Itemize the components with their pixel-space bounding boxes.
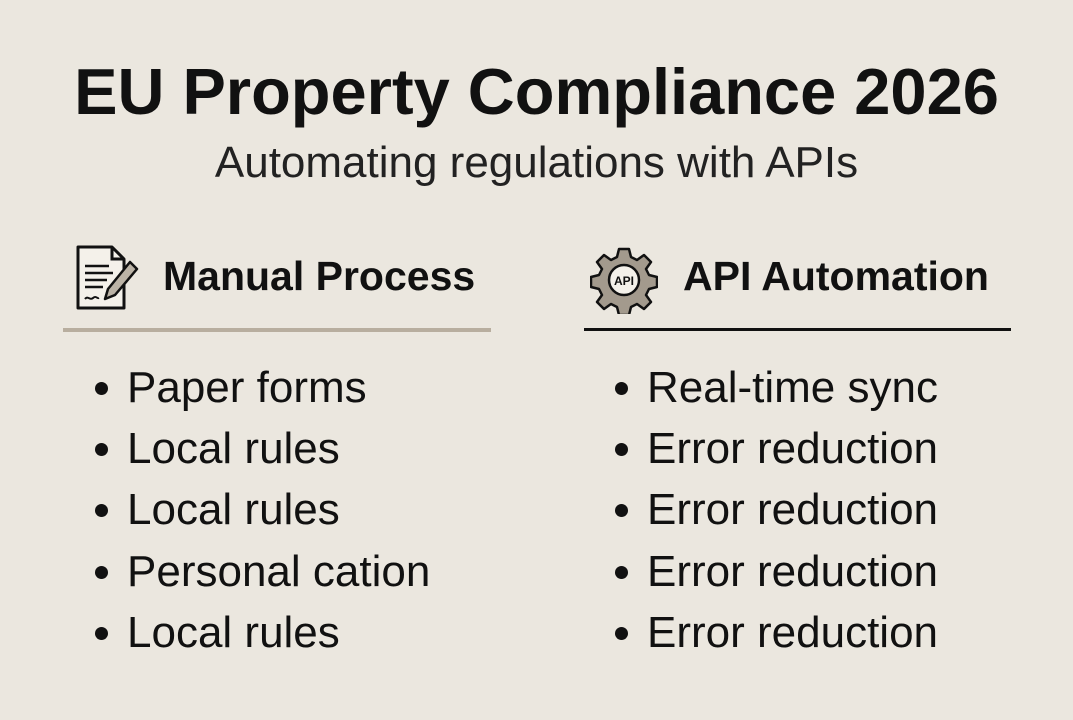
list: api: Error reduction [647, 608, 938, 657]
list: manual: Local rules [127, 485, 340, 534]
icon: document with pencil [76, 246, 138, 310]
heading: api automation: API Automation [683, 253, 989, 299]
list: manual: Personal cation [127, 547, 430, 596]
list: api: Real-time sync [647, 363, 938, 412]
list: manual: Paper forms [127, 363, 367, 412]
list: manual: Local rules [127, 424, 340, 473]
panel: manual process [63, 246, 491, 657]
list: manual: Local rules [127, 608, 340, 657]
title: EU Property Compliance 2026 [74, 55, 999, 128]
subtitle: Automating regulations with APIs [215, 138, 858, 187]
icon: API gear: API [614, 274, 634, 288]
divider black [584, 328, 1011, 331]
list: api: Error reduction [647, 547, 938, 596]
list: manual [95, 363, 430, 657]
divider gray [63, 328, 491, 332]
list: api: Error reduction [647, 485, 938, 534]
heading: manual process: Manual Process [163, 253, 475, 299]
panel: api automation [584, 248, 1011, 657]
icon: API gear [590, 248, 658, 314]
list: api [615, 363, 938, 657]
list: api: Error reduction [647, 424, 938, 473]
